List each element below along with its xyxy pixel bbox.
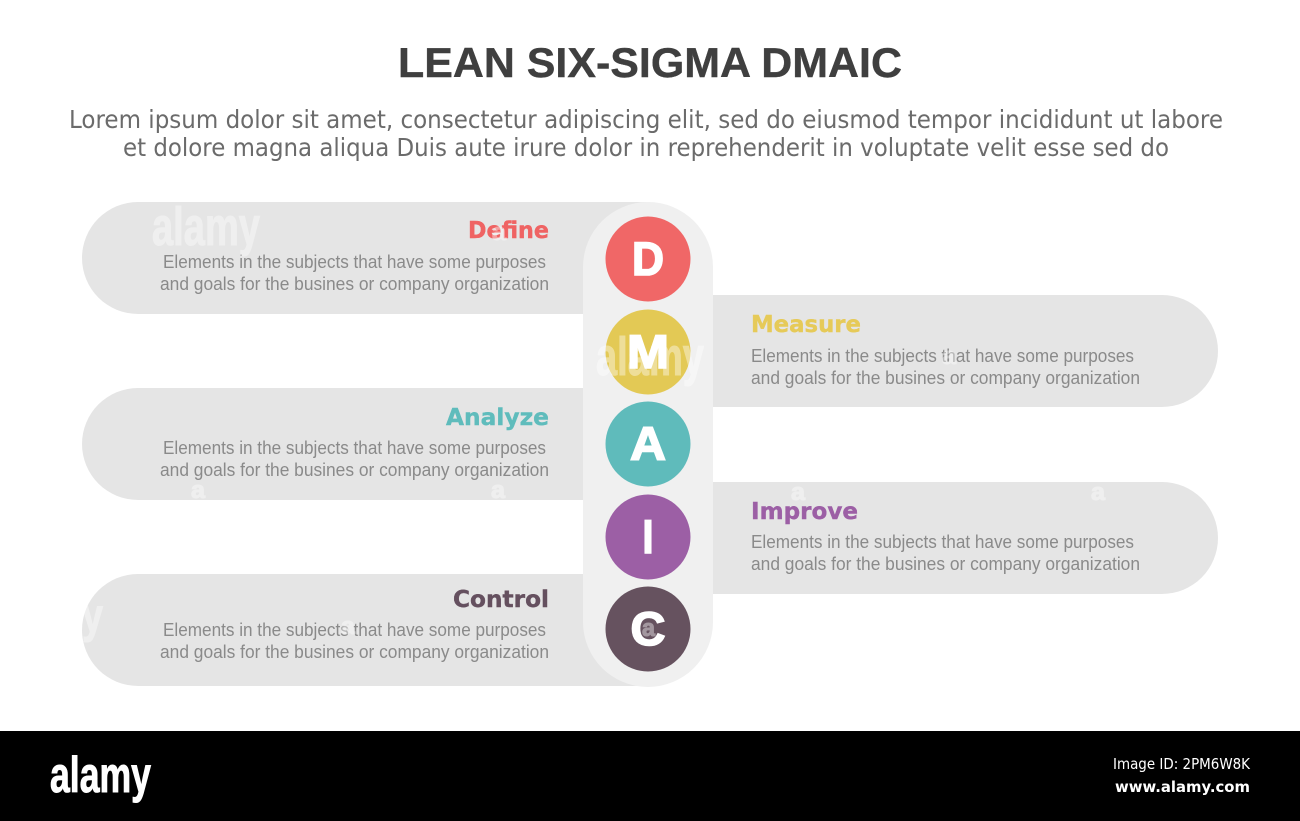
panel: control: Control — [453, 587, 549, 613]
icon: A circle — [606, 402, 690, 486]
watermarks: a — [642, 615, 656, 642]
panel: measure: Measure — [751, 312, 861, 338]
icon: M circle — [606, 310, 690, 394]
image id: Image ID: 2PM6W8K — [1113, 755, 1251, 773]
panel: define: Elements in the subjects that have some purposes — [163, 252, 546, 272]
panel: analyze: and goals for the busines or company organization — [160, 460, 549, 480]
subtitle — [69, 105, 1223, 162]
title: LEAN SIX-SIGMA DMAIC — [398, 39, 902, 86]
panel: measure — [650, 295, 1218, 407]
subtitle: et dolore magna aliqua Duis aute irure dolor in reprehenderit in voluptate velit esse sed do — [123, 133, 1169, 162]
panel: analyze — [82, 388, 650, 500]
footer bar — [0, 731, 1300, 821]
icon: C circle — [606, 586, 690, 672]
panel: control — [82, 574, 650, 686]
watermarks: a — [1091, 479, 1106, 506]
watermarks: a — [942, 343, 957, 370]
panel: analyze: Analyze — [446, 405, 549, 431]
subtitle: Lorem ipsum dolor sit amet, consectetur adipiscing elit, sed do eiusmod tempor incididunt ut labore — [69, 105, 1223, 134]
watermarks: alamy — [596, 327, 704, 387]
panel: control: Elements in the subjects that have some purposes — [163, 620, 546, 640]
panel: define: and goals for the busines or company organization — [160, 274, 549, 294]
watermarks: a — [791, 479, 806, 506]
icon: C circle: C — [630, 602, 666, 655]
icon: D circle: D — [632, 232, 664, 285]
watermarks — [82, 197, 1106, 643]
icon: M circle: M — [627, 325, 669, 378]
icon: I circle: I — [642, 510, 654, 563]
panel: control: and goals for the busines or company organization — [160, 642, 549, 662]
watermarks: a — [191, 477, 206, 504]
icon: A circle: A — [630, 417, 666, 470]
panel: define: Define — [468, 218, 549, 244]
watermarks: a — [341, 613, 356, 640]
panel: define — [82, 202, 650, 314]
watermarks: alamy — [152, 197, 260, 257]
panel: improve — [650, 482, 1218, 594]
watermarks: a — [491, 477, 506, 504]
panel: analyze: Elements in the subjects that have some purposes — [163, 438, 546, 458]
icon: D circle — [606, 216, 690, 302]
panel: improve: Improve — [751, 499, 858, 525]
panel: measure: Elements in the subjects that have some purposes — [751, 346, 1134, 366]
central vertical pill — [583, 202, 713, 687]
watermarks: y — [82, 590, 103, 643]
footer logo: alamy — [50, 747, 151, 803]
panel: improve: Elements in the subjects that have some purposes — [751, 532, 1134, 552]
website: www.alamy.com — [1115, 778, 1250, 796]
panel: improve: and goals for the busines or company organization — [751, 554, 1140, 574]
icon: I circle — [606, 494, 690, 580]
watermarks: a — [492, 219, 507, 246]
panel: measure: and goals for the busines or company organization — [751, 368, 1140, 388]
